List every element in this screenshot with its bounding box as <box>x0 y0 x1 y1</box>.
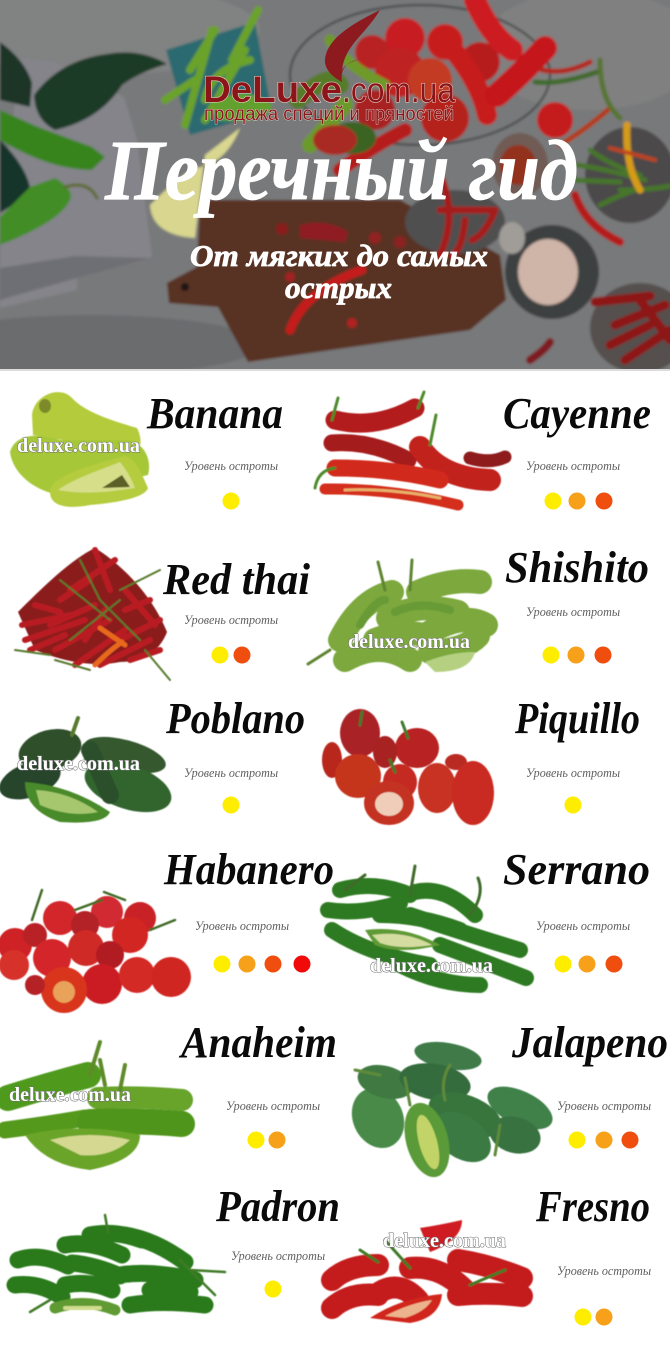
small red pepper <box>537 102 573 138</box>
heading: Shishito <box>505 543 649 592</box>
subtitle: От мягких до самых <box>190 238 488 273</box>
dark poblano <box>34 52 167 130</box>
panel: serrano <box>328 845 650 985</box>
label: Уровень остроты <box>557 1099 652 1113</box>
panel: red thai <box>15 548 311 680</box>
image: fresno peppers <box>332 1220 522 1323</box>
label: Уровень остроты <box>184 613 279 627</box>
logo wordmark: DeLuxe <box>203 69 342 110</box>
heading: Serrano <box>503 845 650 894</box>
label: Уровень остроты <box>526 459 621 473</box>
heading: Habanero <box>163 845 334 894</box>
heading: Red thai <box>162 555 311 604</box>
image: anaheim peppers <box>5 1042 182 1170</box>
heading: Poblano <box>165 694 305 743</box>
salt bowl <box>505 225 599 319</box>
heading: Padron <box>215 1182 340 1231</box>
heat rating <box>542 646 612 664</box>
watermark: deluxe.com.ua <box>348 631 470 653</box>
panel: cayenne <box>315 389 651 510</box>
heat rating <box>568 1132 638 1148</box>
heat rating <box>564 796 582 814</box>
dried chilli bowl <box>590 283 670 373</box>
watermark: deluxe.com.ua <box>17 753 140 775</box>
image: piquillo peppers <box>322 709 494 825</box>
logo: .com.ua <box>342 71 455 110</box>
label: Уровень остроты <box>526 766 621 780</box>
panel: shishito <box>308 543 649 672</box>
panel: poblano <box>0 694 305 823</box>
stone mortar with chillies <box>405 190 505 254</box>
label: Уровень остроты <box>195 919 290 933</box>
label: Уровень остроты <box>526 605 621 619</box>
label: Уровень остроты <box>557 1264 652 1278</box>
watermark: deluxe.com.ua <box>9 1084 131 1106</box>
image: poblano peppers <box>0 718 178 823</box>
image: shishito peppers <box>308 560 486 672</box>
pale pepper <box>150 128 240 238</box>
logo flame <box>325 10 380 82</box>
heading: Piquillo <box>514 694 640 743</box>
red pepper basket <box>290 5 550 145</box>
heading: Fresno <box>535 1182 650 1231</box>
logo tagline: продажа специй и пряностей <box>204 104 454 125</box>
panel: habanero <box>0 845 334 1013</box>
label: Уровень остроты <box>231 1249 326 1263</box>
heat rating <box>248 1132 286 1148</box>
label: Уровень остроты <box>536 919 631 933</box>
subtitle: острых <box>285 270 392 305</box>
panel: piquillo <box>322 694 640 825</box>
heading: Banana <box>146 389 283 438</box>
header photo <box>0 0 670 375</box>
image: jalapeno peppers <box>342 1037 559 1182</box>
cutting board <box>167 200 506 362</box>
image: habanero peppers <box>0 890 191 1013</box>
panel: fresno <box>332 1182 652 1326</box>
heading: Cayenne <box>503 389 651 438</box>
watermark: deluxe.com.ua <box>383 1230 506 1252</box>
heat rating <box>264 1280 282 1298</box>
title: Перечный гид <box>104 122 578 218</box>
label: Уровень остроты <box>226 1099 321 1113</box>
heat rating <box>544 492 612 510</box>
green chilli bowl <box>585 127 670 223</box>
watermark: deluxe.com.ua <box>370 955 493 977</box>
heat rating <box>554 956 622 972</box>
spice bowl <box>492 133 548 197</box>
image: serrano peppers <box>328 866 526 985</box>
image: red thai chillies <box>15 548 170 680</box>
subtitle <box>190 238 488 305</box>
teal basket <box>166 22 272 135</box>
image: padron peppers <box>15 1215 225 1312</box>
small chillies <box>535 72 597 83</box>
heat rating <box>214 956 310 972</box>
image: cayenne pepper <box>315 392 505 505</box>
heat rating <box>222 492 240 510</box>
heat rating <box>222 796 240 814</box>
panel: banana <box>10 389 283 510</box>
label: Уровень остроты <box>184 766 279 780</box>
panel: anaheim <box>5 1018 337 1170</box>
watermark: deluxe.com.ua <box>17 435 140 457</box>
panel: jalapeno <box>342 1018 668 1182</box>
logo <box>203 10 455 125</box>
image: banana pepper <box>10 392 149 507</box>
heat rating <box>574 1308 612 1326</box>
green pepper <box>0 110 105 170</box>
heat rating <box>212 646 250 664</box>
panel: padron <box>15 1182 340 1312</box>
label: Уровень остроты <box>184 459 279 473</box>
towel <box>0 58 152 308</box>
heading: Anaheim <box>178 1018 337 1067</box>
